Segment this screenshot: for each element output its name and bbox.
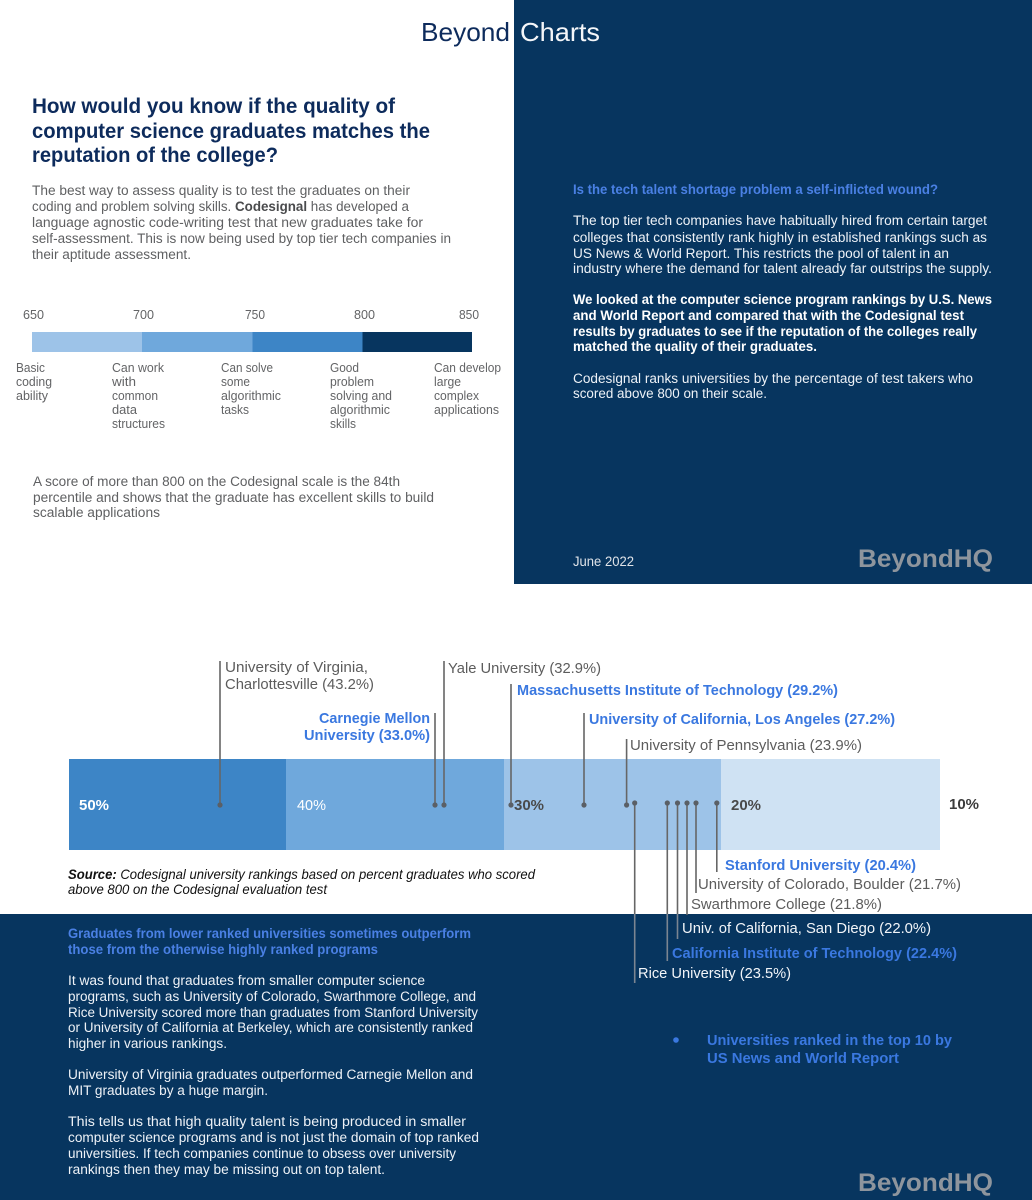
legend: top 10 universities (673, 1032, 953, 1067)
panel: tech talent shortage background (514, 0, 1032, 584)
marker: Swarthmore College (684, 800, 882, 915)
title: Beyond (421, 17, 510, 47)
marker: Carnegie Mellon: University (33.0%) (304, 727, 430, 744)
scale label: good problem solving: Good (330, 361, 359, 375)
scale label: common data structures: common (112, 389, 158, 403)
panel: lower section background (0, 914, 1032, 1200)
scale bar (32, 332, 472, 352)
marker: Yale: Yale University (32.9%) (448, 660, 601, 677)
marker: Stanford (714, 800, 916, 874)
text block: assessing quality (32, 183, 451, 262)
axis labels: 10% (949, 796, 979, 813)
marker: UCLA (581, 711, 895, 808)
text block: assessing quality: language agnostic code-writing test that new graduates take for (32, 215, 424, 230)
chart: percent of graduates above 800 (69, 659, 979, 983)
scale numbers: 850 (459, 308, 479, 322)
scale label: some algorithmic tasks: some (221, 375, 250, 389)
marker: University of Pennsylvania: University of Pennsylvania (23.9%) (630, 737, 862, 754)
legend: top 10 universities: Universities ranked in the top 10 by (707, 1032, 953, 1049)
chart bands (69, 759, 940, 850)
text block: smaller programs finding: higher in various rankings. (68, 1036, 227, 1051)
text block: Codesignal ranking method: scored above 800 on their scale. (573, 386, 767, 401)
scale label: some algorithmic tasks: algorithmic (221, 389, 281, 403)
text block: conclusion (68, 1114, 479, 1177)
text block: bold method statement: We looked at the computer science program rankings by U.S. News (573, 292, 992, 307)
scale label: good problem solving: problem (330, 375, 374, 389)
marker: Caltech: California Institute of Technology (22.4%) (672, 945, 957, 962)
text block: Codesignal ranking method (573, 371, 973, 401)
marker: University of Virginia (217, 659, 374, 808)
marker: University of Colorado (693, 800, 961, 893)
marker: UC San Diego (675, 800, 931, 939)
heading: lower ranked universities (68, 926, 471, 957)
text block: bold method statement: results by graduates to see if the reputation of the colleges really (573, 324, 977, 339)
marker: Rice University: Rice University (23.5%) (638, 965, 791, 982)
marker: Carnegie Mellon: Carnegie Mellon (319, 710, 430, 727)
scale label: large complex applications: large (434, 375, 461, 389)
scale label: large complex applications: complex (434, 389, 480, 403)
axis labels: 20% (731, 797, 761, 814)
text block: Virginia finding: University of Virginia graduates outperformed Carnegie Mellon and (68, 1067, 473, 1082)
scale label: large complex applications: Can develop (434, 361, 501, 375)
scale numbers: 650 (23, 308, 44, 322)
text block: conclusion: This tells us that high quality talent is being produced in smaller (68, 1114, 467, 1129)
title: Charts (520, 17, 600, 47)
marker: Swarthmore College: Swarthmore College (21.8%) (691, 896, 882, 913)
heading: quality of graduates: reputation of the college? (32, 144, 278, 167)
marker: Yale (441, 660, 601, 808)
text block: 84th percentile note (33, 474, 434, 520)
scale label: common data structures (111, 361, 165, 431)
scale label: some algorithmic tasks: Can solve (221, 361, 273, 375)
text block: smaller programs finding: programs, such as University of Colorado, Swarthmore College, and (68, 989, 476, 1004)
scale label: basic coding ability: Basic (16, 361, 45, 375)
scale label: good problem solving: algorithmic (330, 403, 390, 417)
scale label: common data structures: with (111, 375, 136, 389)
marker: Caltech (665, 800, 957, 962)
marker: UC San Diego: Univ. of California, San Diego (22.0%) (682, 920, 931, 937)
text block: 84th percentile note: A score of more than 800 on the Codesignal scale is the 84th (33, 474, 400, 489)
marker: Rice University (632, 800, 791, 983)
heading: lower ranked universities: those from the otherwise highly ranked programs (68, 942, 378, 957)
marker: Carnegie Mellon (304, 710, 438, 808)
marker: University of Virginia: Charlottesville (43.2%) (225, 676, 374, 693)
text block: smaller programs finding: It was found that graduates from smaller computer science (68, 973, 425, 988)
scale label: good problem solving: solving and (330, 389, 392, 403)
legend: top 10 universities: US News and World Report (707, 1050, 899, 1067)
axis labels (79, 796, 979, 814)
marker: University of Virginia: University of Virginia, (225, 659, 368, 676)
axis labels: 50% (79, 797, 109, 814)
scale numbers: 700 (133, 308, 154, 322)
text block: hiring from target colleges: US News & World Report. This restricts the pool of talent in an (573, 246, 949, 261)
axis labels: 30% (514, 797, 544, 814)
scale label: good problem solving: skills (330, 417, 356, 431)
logo: BeyondHQ bottom: BeyondHQ (858, 1169, 993, 1197)
logo: BeyondHQ top: BeyondHQ (858, 545, 993, 573)
text block: bold method statement: and World Report and compared that with the Codesignal test (573, 308, 964, 323)
text block: Virginia finding: MIT graduates by a huge margin. (68, 1083, 268, 1098)
scale label: some algorithmic tasks (221, 361, 281, 417)
scale label: good problem solving (330, 361, 392, 431)
heading: quality of graduates: How would you know if the quality of (32, 95, 396, 118)
text block: bold method statement (573, 292, 992, 354)
source note: above 800 on the Codesignal evaluation test (68, 881, 328, 897)
scale numbers: 800 (354, 308, 375, 322)
text block: assessing quality: The best way to assess quality is to test the graduates on their (32, 183, 411, 198)
scale label: large complex applications: applications (434, 403, 499, 417)
scale label: common data structures: structures (112, 417, 165, 431)
scale numbers (23, 308, 479, 322)
text block: hiring from target colleges (573, 213, 992, 276)
text block: smaller programs finding: Rice University scored more than graduates from Stanford University (68, 1005, 478, 1020)
text block: conclusion: computer science programs and is not just the domain of top ranked (68, 1130, 479, 1145)
heading: quality of graduates: computer science graduates matches the (32, 120, 430, 143)
text block: bold method statement: matched the quality of their graduates. (573, 339, 817, 354)
scale label: basic coding ability: coding (16, 375, 52, 389)
title (421, 17, 600, 47)
text block: conclusion: rankings then they may be missing out on top talent. (68, 1162, 385, 1177)
text block: assessing quality: their aptitude assessment. (32, 247, 191, 262)
marker: MIT: Massachusetts Institute of Technology (29.2%) (517, 682, 838, 699)
text block: hiring from target colleges: industry where the demand for talent already far outstrips the supply. (573, 261, 992, 276)
axis labels: 40% (297, 797, 326, 814)
scale label: large complex applications (434, 361, 501, 417)
marker: UCLA: University of California, Los Angeles (27.2%) (589, 711, 895, 728)
text block: Virginia finding (68, 1067, 473, 1098)
text block: conclusion: universities. If tech companies continue to obsess over university (68, 1146, 456, 1161)
scale label: common data structures: data (112, 403, 137, 417)
scale label: some algorithmic tasks: tasks (221, 403, 249, 417)
text block: assessing quality: coding and problem solving skills. Codesignal has developed a (32, 199, 409, 214)
heading: lower ranked universities: Graduates from lower ranked universities sometimes outperform (68, 926, 471, 941)
marker: University of Colorado: University of Colorado, Boulder (21.7%) (698, 876, 961, 893)
marker: University of Pennsylvania (624, 737, 862, 808)
heading: self-inflicted wound: Is the tech talent shortage problem a self-inflicted wound? (573, 182, 938, 197)
scale label: basic coding ability: ability (16, 389, 49, 403)
heading: quality of graduates (32, 95, 430, 167)
source note: Source: Codesignal university rankings based on percent graduates who scored (68, 866, 536, 882)
text block: smaller programs finding (68, 973, 478, 1051)
text block: hiring from target colleges: The top tier tech companies have habitually hired from certain target (573, 213, 987, 228)
text block: 84th percentile note: scalable applications (33, 505, 160, 520)
scale numbers: 750 (245, 308, 265, 322)
text block: 84th percentile note: percentile and shows that the graduate has excellent skills to build (33, 490, 434, 505)
source note (68, 866, 536, 897)
text block: hiring from target colleges: colleges that consistently rank highly in established rankings such as (573, 230, 987, 245)
scale label: common data structures: Can work (112, 361, 165, 375)
text block: Codesignal ranking method: Codesignal ranks universities by the percentage of test takers who (573, 371, 973, 386)
date: June 2022 (573, 554, 634, 569)
chart: Codesignal score scale (16, 308, 501, 431)
scale label: basic coding ability (16, 361, 52, 403)
marker: Stanford: Stanford University (20.4%) (725, 857, 916, 874)
text block: assessing quality: self-assessment. This is now being used by top tier tech companies in (32, 231, 451, 246)
text block: smaller programs finding: or University of California at Berkeley, which are consistently ranked (68, 1020, 473, 1035)
marker: MIT (508, 682, 838, 808)
